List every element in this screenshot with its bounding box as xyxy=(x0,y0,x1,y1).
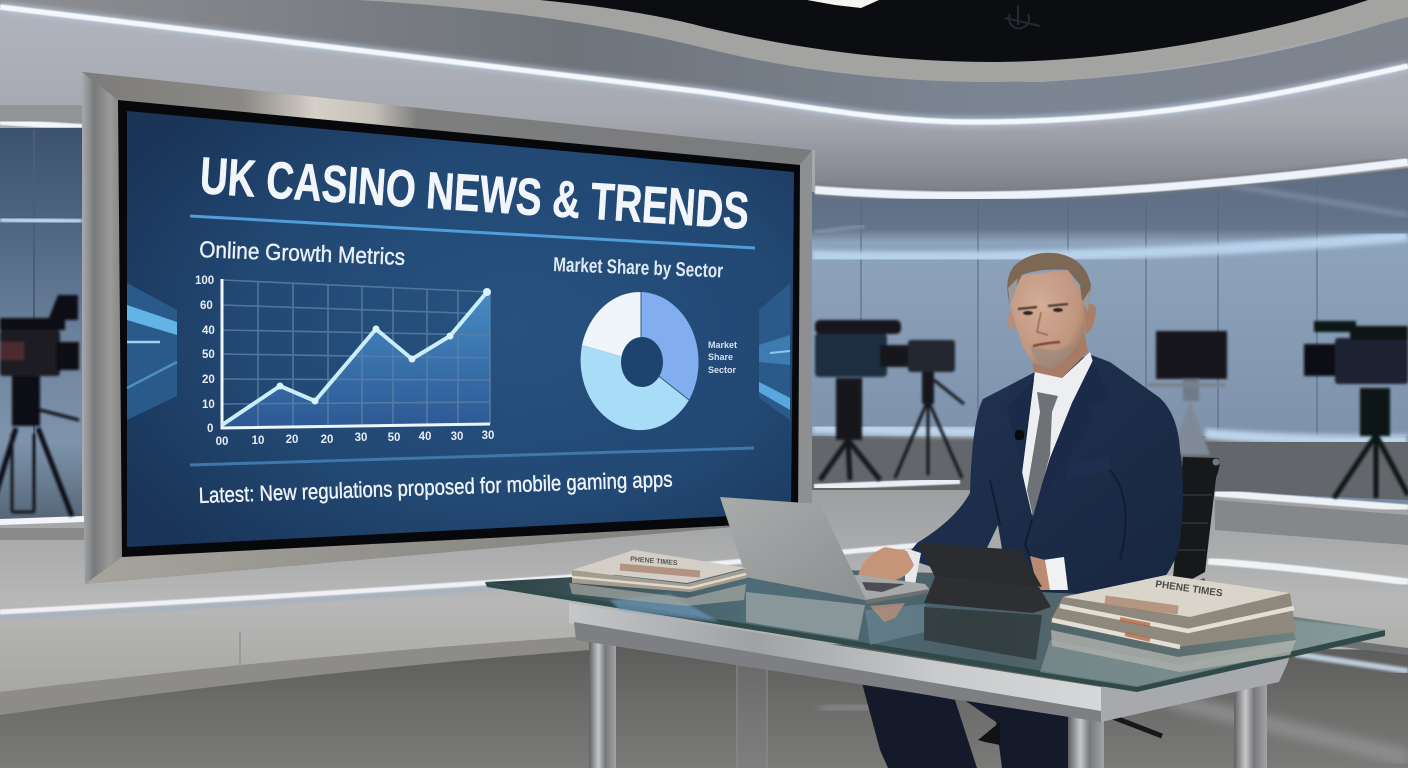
donut legend: Sector xyxy=(708,365,737,375)
desk reflections xyxy=(610,592,1385,687)
lower wall and floor xyxy=(0,481,1408,768)
trousers below desk xyxy=(862,683,1162,768)
hair xyxy=(1007,253,1091,312)
lapel microphone xyxy=(1015,430,1024,440)
desk glass edge xyxy=(485,582,1385,692)
desk legs xyxy=(589,630,1267,768)
neck xyxy=(1030,330,1088,378)
x axis labels: 30 xyxy=(482,430,494,442)
glass wall, right xyxy=(812,168,1408,505)
ceiling light strips xyxy=(0,7,1408,196)
x axis labels: 50 xyxy=(388,432,400,444)
left side chevrons xyxy=(127,283,177,420)
x axis labels: 20 xyxy=(286,434,298,446)
tablet screen xyxy=(918,543,1042,587)
y axis labels: 100 xyxy=(195,275,214,287)
left sleeve cuff xyxy=(905,548,921,585)
camera, far right xyxy=(1304,321,1408,498)
right cuff xyxy=(1043,557,1068,590)
y axis labels: 60 xyxy=(200,300,213,312)
line chart xyxy=(195,275,494,448)
x axis labels: 00 xyxy=(216,436,228,448)
left hand xyxy=(858,547,914,582)
donut legend: Market xyxy=(708,340,737,350)
pie heading: Market Share by Sector xyxy=(553,254,724,283)
laptop lid xyxy=(720,497,866,600)
camera, far left xyxy=(0,295,79,516)
jacket xyxy=(905,355,1183,594)
donut legend xyxy=(708,340,737,375)
newspapers, left xyxy=(569,550,747,606)
x axis labels: 40 xyxy=(419,431,431,443)
right side chevrons xyxy=(759,283,790,420)
wall screen xyxy=(82,72,812,584)
masthead: PHENE TIMES xyxy=(630,556,678,567)
x axis labels: 30 xyxy=(355,432,367,444)
x axis labels: 30 xyxy=(451,431,463,443)
tablet xyxy=(918,543,1051,613)
tablet stand xyxy=(924,577,1051,613)
y axis labels: 40 xyxy=(202,325,215,337)
news ticker: Latest: New regulations proposed for mobile gaming apps xyxy=(198,466,673,508)
face features xyxy=(1018,304,1068,346)
camera, centre xyxy=(815,320,964,480)
glass wall, left xyxy=(0,122,84,522)
beard stubble xyxy=(1030,340,1078,369)
y axis labels: 10 xyxy=(202,399,215,411)
screen title: UK CASINO NEWS & TRENDS xyxy=(198,147,751,241)
laptop xyxy=(720,497,930,604)
news anchor xyxy=(858,253,1183,594)
donut chart xyxy=(581,292,737,430)
lapels xyxy=(1032,360,1110,520)
x axis labels: 10 xyxy=(252,435,264,447)
laptop base xyxy=(746,575,930,600)
y axis labels: 20 xyxy=(202,374,215,386)
masthead: PHENE TIMES xyxy=(1155,579,1224,599)
y axis labels xyxy=(195,275,215,435)
x axis labels xyxy=(216,430,494,448)
face xyxy=(1010,270,1085,369)
monitor on stand xyxy=(1148,331,1227,455)
x axis labels: 20 xyxy=(321,434,333,446)
steel frame xyxy=(569,603,1101,712)
newspapers, right xyxy=(1051,575,1296,672)
shirt xyxy=(1022,352,1093,515)
chart heading: Online Growth Metrics xyxy=(199,236,406,270)
y axis labels: 50 xyxy=(202,349,215,361)
tie xyxy=(1027,392,1058,517)
ears xyxy=(1008,304,1096,334)
y axis labels: 0 xyxy=(207,423,213,435)
screen frame xyxy=(82,72,812,584)
glass desk xyxy=(485,567,1385,722)
desk top xyxy=(485,567,1385,687)
screen panel xyxy=(127,111,794,547)
donut legend: Share xyxy=(708,352,733,362)
desk chair xyxy=(1172,457,1220,590)
gap between arm and torso xyxy=(985,525,1003,555)
